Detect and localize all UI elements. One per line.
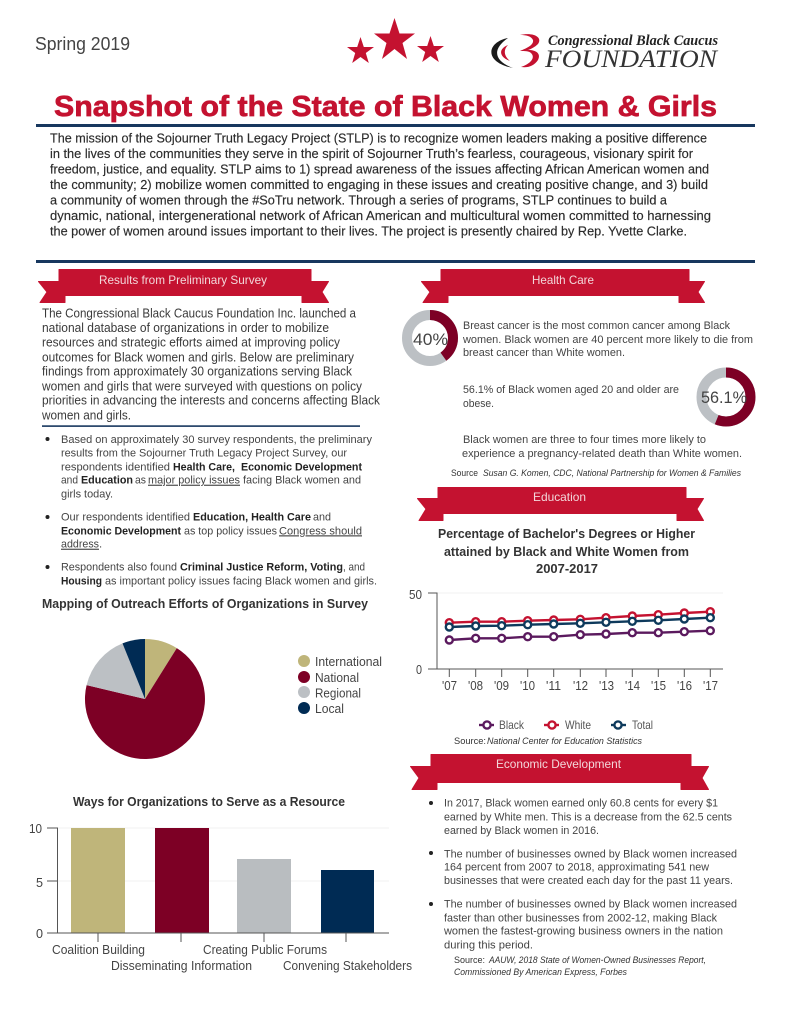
survey description paragraph: national database of organizations in order to mobilize <box>42 321 329 335</box>
economic development bullets: businesses that were created each day for the past 11 years. <box>444 875 733 887</box>
source: education: National Center for Education Statistics <box>487 736 642 746</box>
survey findings bullets: Our respondents identified <box>61 512 190 524</box>
economic development bullets: earned by White men. This is a decrease from the 62.5 cents <box>444 811 732 823</box>
line chart legend <box>479 718 653 732</box>
ribbon: Health Care <box>422 270 704 302</box>
survey findings bullets: Education, Health Care <box>193 512 311 524</box>
pie legend <box>298 654 382 716</box>
axis labels: '17 <box>703 678 718 693</box>
bar chart: ways to serve as a resource: Convening Stakeholders <box>283 958 412 973</box>
logo: Congressional Black Caucus Foundation: Congressional Black Caucus <box>548 33 718 49</box>
obesity text: 56.1% of Black women aged 20 and older are <box>463 384 679 396</box>
economic development bullets: In 2017, Black women earned only 60.8 cents for every $1 <box>444 798 718 810</box>
line chart legend: Total <box>632 718 653 732</box>
intro paragraph: a community of women through the #SoTru network. Through a series of programs, STLP continues to build a <box>50 192 668 208</box>
pie legend: Regional <box>315 686 361 700</box>
intro paragraph: the community; 2) mobilize women committed to engaging in these issues and creating positive change, and 3) build <box>50 177 708 192</box>
logo: Congressional Black Caucus Foundation <box>491 33 718 73</box>
survey findings bullets: Economic Development <box>241 461 362 473</box>
survey findings bullets: Congress should <box>279 525 362 537</box>
series: Black <box>446 627 714 644</box>
obesity text <box>463 384 679 410</box>
source: economic development: Source: <box>454 955 485 965</box>
pregnancy text: Black women are three to four times more likely to <box>463 434 706 446</box>
economic development bullets <box>429 798 737 951</box>
bar chart: ways to serve as a resource: Disseminating Information <box>111 958 252 973</box>
axis labels: '14 <box>625 678 640 693</box>
bar chart: ways to serve as a resource: Coalition Building <box>52 942 145 957</box>
ribbon: Results from Preliminary Survey <box>38 270 328 302</box>
donut: 40 percent: 40% <box>413 330 448 349</box>
line chart legend: White <box>565 718 591 732</box>
economic development bullets: during this period. <box>444 939 533 951</box>
intro paragraph: dynamic, national, intergenerational network of African American and multicultural women committed to harnessing <box>50 208 711 223</box>
source: education: Source: <box>454 736 486 746</box>
heading: education chart <box>438 527 695 576</box>
bar chart: ways to serve as a resource: Creating Public Forums <box>203 942 327 957</box>
axis labels: '10 <box>520 678 535 693</box>
source: health care: Susan G. Komen, CDC, National Partnership for Women & Families <box>483 468 741 478</box>
line chart legend: Black <box>499 718 525 732</box>
economic development bullets: The number of businesses owned by Black women increased <box>444 899 737 911</box>
survey findings bullets: as top policy issues <box>184 525 277 537</box>
survey description paragraph: The Congressional Black Caucus Foundation Inc. launched a <box>42 306 356 320</box>
survey findings bullets: Criminal Justice Reform, Voting <box>180 562 343 574</box>
survey findings bullets: Housing <box>61 576 102 588</box>
axis labels: '13 <box>599 678 614 693</box>
pie legend: National <box>315 670 359 685</box>
survey findings bullets: Respondents also found <box>61 562 177 574</box>
ribbon: Economic Development <box>410 754 708 790</box>
bar chart: ways to serve as a resource <box>29 821 412 973</box>
logo: Congressional Black Caucus Foundation: FOUNDATION <box>544 46 718 73</box>
survey findings bullets: and <box>313 512 331 524</box>
bar chart: ways to serve as a resource: 5 <box>36 875 43 890</box>
survey findings bullets: Based on approximately 30 survey respondents, the preliminary <box>61 434 372 446</box>
donut: 56.1 percent: 56.1% <box>701 388 747 407</box>
survey findings bullets: Education <box>81 475 133 487</box>
series: White <box>446 608 714 626</box>
bar chart: ways to serve as a resource: 0 <box>36 926 43 941</box>
heading: outreach pie chart: Mapping of Outreach Efforts of Organizations in Survey <box>42 597 368 611</box>
survey description paragraph: findings from approximately 30 organizations serving Black <box>42 365 353 379</box>
donut: 56.1 percent <box>701 372 750 422</box>
source: economic development <box>454 955 706 977</box>
source: economic development: AAUW, 2018 State of Women-Owned Businesses Report, <box>488 955 706 965</box>
survey findings bullets: Economic Development <box>61 525 181 537</box>
axis labels: '07 <box>442 678 457 693</box>
survey findings bullets: , and <box>343 562 365 574</box>
axis labels: '15 <box>651 678 666 693</box>
pie legend: Local <box>315 701 344 716</box>
survey findings bullets: as <box>135 475 146 487</box>
survey description paragraph: outcomes for Black women and girls. Below are preliminary <box>42 350 355 364</box>
date label: Spring 2019 <box>35 34 130 54</box>
survey findings bullets: address <box>61 539 99 551</box>
intro paragraph: freedom, justice, and equality. STLP aims to 1) spread awareness of the issues affecting African American women and <box>50 162 709 176</box>
ribbon: Education: Education <box>533 490 586 504</box>
economic development bullets: 164 percent from 2007 to 2018, approximating 541 new <box>444 862 710 874</box>
ribbon: Education <box>418 488 704 520</box>
line chart: bachelor's degrees <box>409 587 723 693</box>
axis labels: 50 <box>409 587 422 602</box>
survey findings bullets: major policy issues <box>148 475 240 487</box>
series: Total <box>446 614 714 630</box>
heading: resource bar chart: Ways for Organizations to Serve as a Resource <box>73 795 345 809</box>
breast cancer text <box>462 320 753 359</box>
survey findings bullets: as important policy issues facing Black women and girls. <box>105 576 377 588</box>
intro paragraph: the power of women around issues important to their lives. The project is presently chaired by Rep. Yvette Clarke. <box>50 224 687 238</box>
heading: education chart: Percentage of Bachelor's Degrees or Higher <box>438 527 695 541</box>
economic development bullets: earned by Black women in 2016. <box>444 825 599 837</box>
source: economic development: Commissioned By American Express, Forbes <box>454 967 627 977</box>
survey findings bullets: facing Black women and <box>243 475 361 487</box>
pie legend: International <box>315 654 382 669</box>
icon: three stars <box>347 18 444 63</box>
economic development bullets: faster than other businesses from 2002-12, making Black <box>444 912 717 924</box>
survey findings bullets: results from the Sojourner Truth Legacy Project Survey, our <box>61 448 347 460</box>
pregnancy text <box>462 434 742 460</box>
survey findings bullets: respondents identified <box>61 461 170 473</box>
economic development bullets: women the fastest-growing business owners in the nation <box>443 926 723 938</box>
survey findings bullets: and <box>61 475 78 487</box>
survey description paragraph <box>41 306 381 422</box>
intro paragraph: The mission of the Sojourner Truth Legacy Project (STLP) is to recognize women leaders making a positive difference <box>50 130 707 146</box>
breast cancer text: Breast cancer is the most common cancer among Black <box>463 320 730 332</box>
axis labels: '08 <box>468 678 483 693</box>
axis labels: '12 <box>573 678 588 693</box>
heading: education chart: attained by Black and White Women from <box>444 545 689 559</box>
pie chart: outreach efforts <box>85 639 205 759</box>
axis labels: 0 <box>416 662 422 677</box>
axis labels <box>409 587 718 693</box>
source: health care: Source <box>451 468 478 478</box>
survey description paragraph: women and girls. <box>41 408 131 422</box>
title: Snapshot of the State of Black Women & Girls <box>54 91 717 123</box>
ribbon: Results from Preliminary Survey: Results from Preliminary Survey <box>99 273 267 287</box>
survey findings bullets: girls today. <box>61 488 113 500</box>
pregnancy text: experience a pregnancy-related death than White women. <box>462 448 742 460</box>
intro paragraph: in the lives of the communities they serve in the spirit of Sojourner Truth’s fearless, courageous, visionary spirit for <box>50 146 694 161</box>
ribbon: Health Care: Health Care <box>532 273 594 287</box>
intro paragraph <box>50 130 711 238</box>
survey findings bullets <box>46 434 377 588</box>
survey findings bullets: Health Care, <box>173 461 235 473</box>
survey findings bullets: . <box>99 539 102 551</box>
axis labels: '11 <box>546 678 561 693</box>
obesity text: obese. <box>463 398 494 410</box>
survey description paragraph: women and girls that were surveyed with questions on policy <box>41 379 363 393</box>
breast cancer text: breast cancer than White women. <box>463 347 625 359</box>
heading: education chart: 2007-2017 <box>536 562 598 576</box>
axis labels: '16 <box>677 678 692 693</box>
survey description paragraph: resources and strategic efforts aimed at improving policy <box>42 336 341 350</box>
ribbon: Economic Development: Economic Development <box>496 757 622 771</box>
bar chart: ways to serve as a resource: 10 <box>29 821 42 836</box>
axis labels: '09 <box>494 678 509 693</box>
breast cancer text: women. Black women are 40 percent more likely to die from <box>462 334 753 346</box>
donut: 40 percent <box>407 315 453 361</box>
survey description paragraph: priorities in advancing the interests and concerns affecting Black <box>42 394 381 408</box>
economic development bullets: The number of businesses owned by Black women increased <box>444 848 737 860</box>
